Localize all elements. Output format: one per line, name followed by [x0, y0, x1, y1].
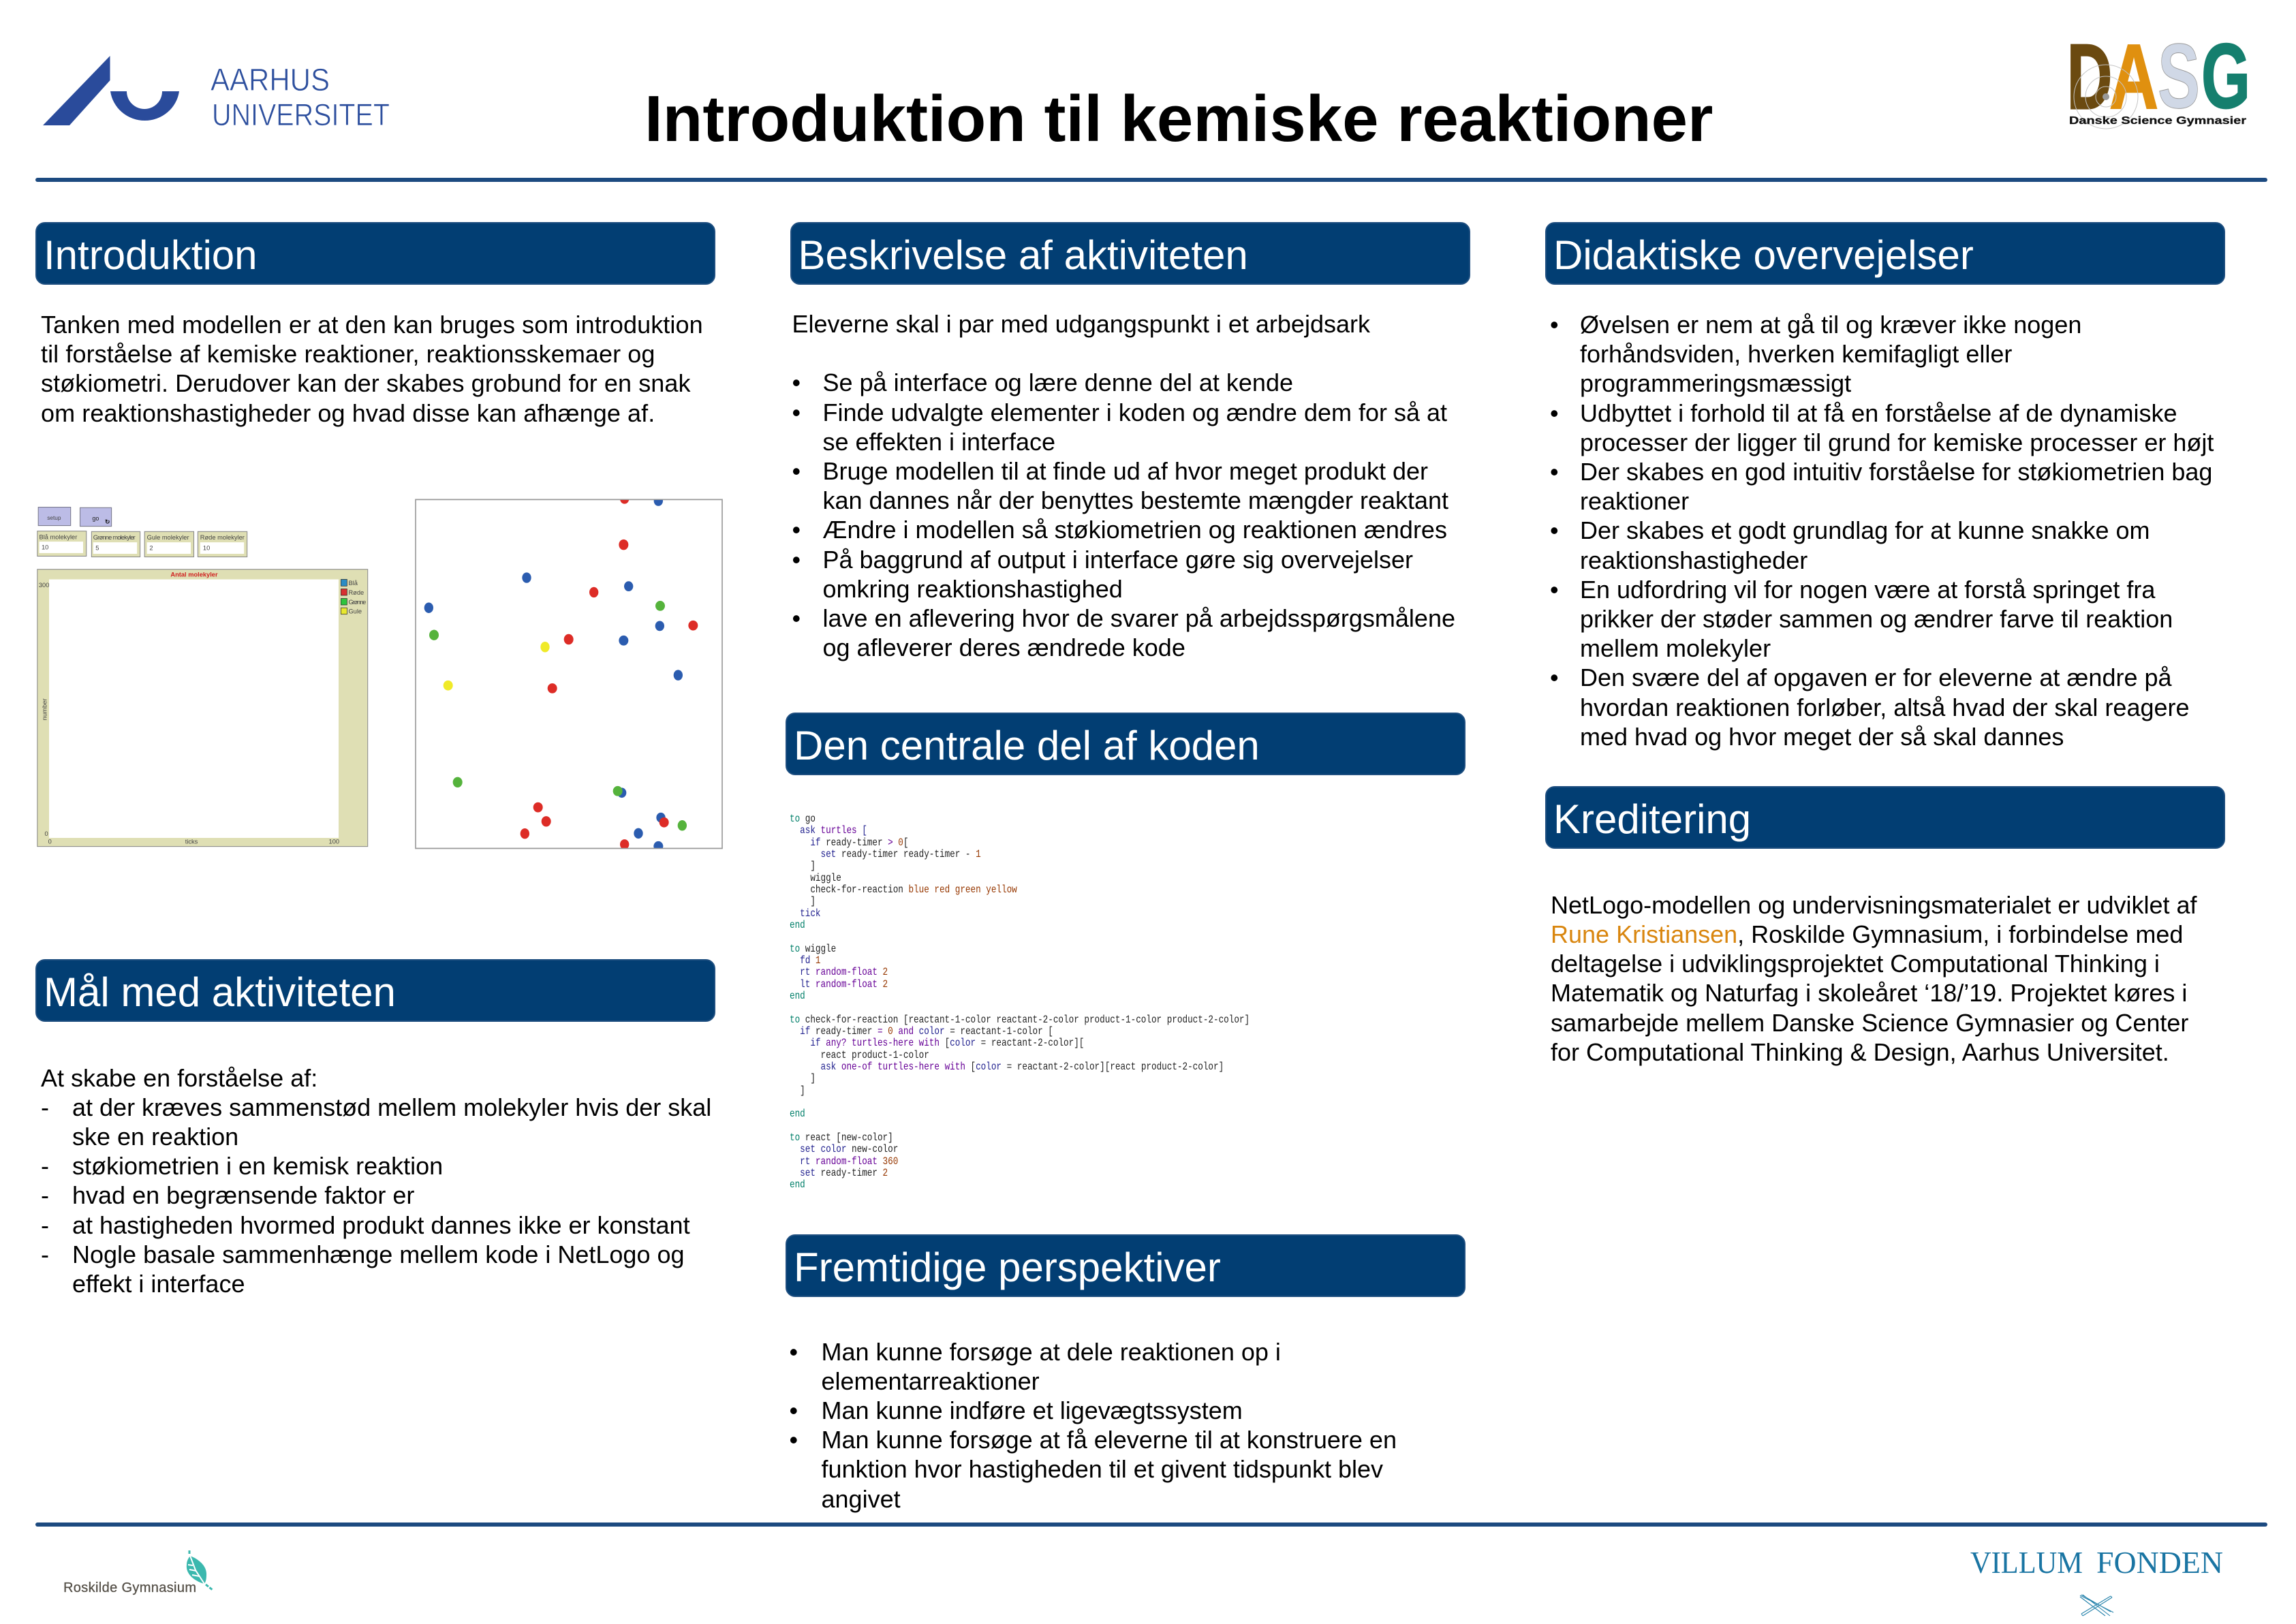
text: credits paragraph: Rune Kristiansen, Roskilde Gymnasium, i forbindelse med	[1551, 920, 2183, 948]
NetLogo interface screenshot: Røde	[348, 589, 364, 596]
text: introduction paragraph: støkiometri. Derudover kan der skabes grobund for en snak	[41, 369, 691, 397]
text: activity description: •	[792, 399, 801, 426]
text: future perspectives list: Man kunne indføre et ligevægtssystem	[822, 1396, 1243, 1424]
text: didactic considerations list: reaktioner	[1580, 487, 1689, 515]
logo: Roskilde Gymnasium: Roskilde Gymnasium	[63, 1580, 196, 1595]
text: didactic considerations list: med hvad og hvor meget der så skal dannes	[1580, 723, 2064, 751]
text: didactic considerations list: processer der ligger til grund for kemiske processer er højt	[1580, 428, 2214, 456]
text: future perspectives list: funktion hvor hastigheden til et givent tidspunkt blev	[822, 1455, 1383, 1483]
text: future perspectives list: •	[789, 1426, 798, 1454]
logo: Danske Science Gymnasier: Danske Science Gymnasier	[2069, 115, 2246, 127]
logo: Danske Science Gymnasier	[2067, 34, 2250, 129]
heading: Fremtidige perspektiver: Fremtidige perspektiver	[794, 1245, 1221, 1290]
NetLogo interface screenshot: 10	[203, 545, 210, 552]
heading: Introduktion	[35, 222, 715, 285]
text: didactic considerations list: Der skabes en god intuitiv forståelse for støkiometrien bag	[1580, 458, 2212, 486]
text: didactic considerations list: Den svære del af opgaven er for eleverne at ændre på	[1580, 663, 2172, 691]
NetLogo interface screenshot: 0	[44, 830, 48, 837]
logo: Roskilde Gymnasium	[63, 1550, 213, 1595]
text: activity description: •	[792, 604, 801, 632]
NetLogo interface screenshot: Grønne	[348, 599, 366, 606]
NetLogo interface screenshot: Røde molekyler	[200, 534, 245, 541]
text: didactic considerations list: •	[1550, 663, 1559, 691]
heading: Introduktion: Introduktion	[44, 232, 258, 278]
text: activity description	[792, 310, 1455, 661]
text: activity description: •	[792, 546, 801, 574]
panel: Mål med aktiviteten	[35, 959, 715, 1298]
text: credits paragraph: NetLogo-modellen og undervisningsmaterialet er udviklet af	[1551, 891, 2197, 919]
text: goals list: at der kræves sammenstød mellem molekyler hvis der skal	[72, 1093, 711, 1121]
text: future perspectives list: •	[789, 1338, 798, 1365]
panel: Fremtidige perspektiver	[786, 1234, 1465, 1513]
heading: Mål med aktiviteten: Mål med aktiviteten	[44, 969, 396, 1015]
NetLogo interface screenshot: 100	[329, 838, 339, 845]
heading: Beskrivelse af aktiviteten: Beskrivelse af aktiviteten	[798, 232, 1248, 278]
NetLogo interface screenshot: Gule molekyler	[147, 534, 189, 541]
text: activity description: •	[792, 369, 801, 396]
NetLogo interface screenshot: Blå molekyler	[40, 533, 77, 541]
text: didactic considerations list: •	[1550, 311, 1559, 339]
text: didactic considerations list: •	[1550, 399, 1559, 427]
text: didactic considerations list	[1550, 311, 2214, 751]
text: activity description: •	[792, 457, 801, 485]
heading: Fremtidige perspektiver	[786, 1234, 1465, 1297]
text: goals list: At skabe en forståelse af:	[41, 1064, 317, 1092]
text: didactic considerations list: reaktionshastigheder	[1580, 546, 1808, 574]
text: goals list: -	[41, 1152, 49, 1180]
panel: Didaktiske overvejelser	[1545, 222, 2225, 751]
NetLogo interface screenshot: Grønne molekyler	[93, 534, 136, 541]
heading: Kreditering	[1545, 786, 2225, 849]
logo: Aarhus Universitet: AARHUS	[211, 62, 330, 97]
logo: Villum Fonden	[1970, 1546, 2223, 1616]
text: goals list: hvad en begrænsende faktor er	[72, 1181, 414, 1209]
text: goals list: -	[41, 1181, 49, 1209]
text: introduction paragraph: Tanken med modellen er at den kan bruges som introduktion	[41, 311, 703, 339]
text: didactic considerations list: •	[1550, 576, 1559, 604]
text: activity description: lave en aflevering hvor de svarer på arbejdsspørgsmålene	[823, 604, 1455, 632]
text: introduction paragraph: til forståelse af kemiske reaktioner, reaktionsskemaer og	[41, 340, 655, 368]
text: future perspectives list: •	[789, 1396, 798, 1424]
text: activity description: På baggrund af output i interface gøre sig overvejelser	[823, 546, 1413, 574]
NetLogo interface screenshot: 0	[48, 838, 52, 845]
text: introduction paragraph	[41, 311, 703, 427]
heading: Den centrale del af koden	[786, 713, 1465, 775]
text: didactic considerations list: •	[1550, 516, 1559, 544]
heading: Beskrivelse af aktiviteten	[790, 222, 1470, 285]
NetLogo interface screenshot: Blå	[348, 580, 358, 587]
heading: Den centrale del af koden: Den centrale del af koden	[794, 723, 1260, 768]
NetLogo interface screenshot: Gule	[348, 608, 362, 615]
text: didactic considerations list: Der skabes et godt grundlag for at kunne snakke om	[1580, 516, 2150, 544]
text: didactic considerations list: •	[1550, 458, 1559, 486]
text: activity description: kan dannes når der benyttes bestemte mængder reaktant	[823, 486, 1448, 514]
heading: Didaktiske overvejelser: Didaktiske overvejelser	[1553, 232, 1974, 278]
text: goals list: Nogle basale sammenhænge mellem kode i NetLogo og	[72, 1240, 685, 1268]
NetLogo interface screenshot: 2	[149, 545, 153, 552]
panel: Introduktion	[35, 222, 715, 427]
text: credits paragraph: for Computational Thinking & Design, Aarhus Universitet.	[1551, 1038, 2169, 1066]
text: goals list: støkiometrien i en kemisk reaktion	[72, 1152, 443, 1180]
NetLogo interface screenshot: setup	[47, 514, 61, 521]
logo: Aarhus Universitet	[43, 56, 390, 132]
text: future perspectives list: elementarreaktioner	[822, 1367, 1040, 1395]
panel: Beskrivelse af aktiviteten	[790, 222, 1470, 661]
text: didactic considerations list: prikker der støder sammen og ændrer farve til reaktion	[1580, 605, 2173, 633]
text: didactic considerations list: En udfordring vil for nogen være at forstå springet fra	[1580, 576, 2155, 604]
text: activity description: Finde udvalgte elementer i koden og ændre dem for så at	[823, 399, 1447, 426]
text: didactic considerations list: forhåndsviden, hverken kemifagligt eller	[1580, 340, 2012, 368]
heading: Didaktiske overvejelser	[1545, 222, 2225, 285]
text: goals list	[41, 1064, 711, 1298]
heading: Kreditering: Kreditering	[1553, 796, 1751, 842]
text: activity description: se effekten i interface	[823, 428, 1055, 456]
NetLogo interface screenshot: 10	[42, 544, 48, 551]
text: goals list: -	[41, 1211, 49, 1239]
code listing: to go ask turtles [ if ready-timer > 0[ set ready-timer ready-timer - 1 ] wiggle check-for-reaction blue red green yellow ] tick end to wiggle fd 1 rt random-float 2 lt random-float 2 end to check-for-reaction [reactant-1-color reactant-2-color product-1-color product-2-color] if ready-timer = 0 and color = reactant-1-color [ if any? turtles-here with [color = reactant-2-color][ react product-1-color ask one-of turtles-here with [color = reactant-2-color][react product-2-color] ] ] end to react [new-color] set color new-color rt random-float 360 set ready-timer 2 end	[790, 813, 1250, 1191]
text: future perspectives list: Man kunne forsøge at dele reaktionen op i	[822, 1338, 1281, 1365]
text: activity description: Ændre i modellen så støkiometrien og reaktionen ændres	[823, 516, 1447, 544]
NetLogo interface screenshot: number	[42, 698, 48, 720]
text: credits paragraph: Matematik og Naturfag i skoleåret ‘18/’19. Projektet køres i	[1551, 979, 2187, 1007]
NetLogo interface screenshot: go	[92, 515, 99, 522]
text: didactic considerations list: Udbyttet i forhold til at få en forståelse af de dynamiske	[1580, 399, 2177, 427]
text: credits paragraph: samarbejde mellem Danske Science Gymnasier og Center	[1551, 1008, 2188, 1037]
text: credits paragraph	[1551, 891, 2197, 1066]
text: activity description: Bruge modellen til at finde ud af hvor meget produkt der	[823, 457, 1428, 485]
text: didactic considerations list: hvordan reaktionen forløber, altså hvad der skal reagere	[1580, 693, 2190, 721]
text: activity description: Eleverne skal i par med udgangspunkt i et arbejdsark	[792, 310, 1370, 338]
heading: Mål med aktiviteten	[35, 959, 715, 1022]
text: credits paragraph: deltagelse i udviklingsprojektet Computational Thinking i	[1551, 950, 2160, 978]
NetLogo interface screenshot: Antal molekyler	[170, 572, 218, 578]
title: Introduktion til kemiske reaktioner	[645, 82, 1713, 155]
text: goals list: -	[41, 1093, 49, 1121]
NetLogo interface screenshot: 300	[39, 582, 49, 589]
text: activity description: omkring reaktionshastighed	[823, 575, 1123, 603]
text: activity description: •	[792, 516, 801, 544]
text: introduction paragraph: om reaktionshastigheder og hvad disse kan afhænge af.	[41, 399, 655, 427]
text: didactic considerations list: mellem molekyler	[1580, 634, 1771, 662]
text: goals list: ske en reaktion	[72, 1123, 238, 1151]
text: future perspectives list: angivet	[822, 1485, 901, 1513]
NetLogo interface screenshot: ↻	[105, 518, 110, 525]
text: goals list: effekt i interface	[72, 1270, 245, 1298]
text: goals list: -	[41, 1240, 49, 1268]
text: activity description: Se på interface og lære denne del at kende	[823, 369, 1293, 396]
text: didactic considerations list: programmeringsmæssigt	[1580, 369, 1851, 397]
NetLogo interface screenshot: 5	[95, 545, 99, 552]
NetLogo interface screenshot	[37, 507, 368, 847]
text: activity description: og afleverer deres ændrede kode	[823, 634, 1185, 661]
text: future perspectives list: Man kunne forsøge at få eleverne til at konstruere en	[822, 1426, 1397, 1454]
text: didactic considerations list: Øvelsen er nem at gå til og kræver ikke nogen	[1580, 311, 2081, 339]
NetLogo world view with molecules	[415, 499, 723, 849]
text: goals list: at hastigheden hvormed produkt dannes ikke er konstant	[72, 1211, 690, 1239]
text: future perspectives list	[789, 1338, 1397, 1513]
panel: Kreditering	[1545, 786, 2225, 1066]
NetLogo interface screenshot: ticks	[185, 838, 198, 845]
